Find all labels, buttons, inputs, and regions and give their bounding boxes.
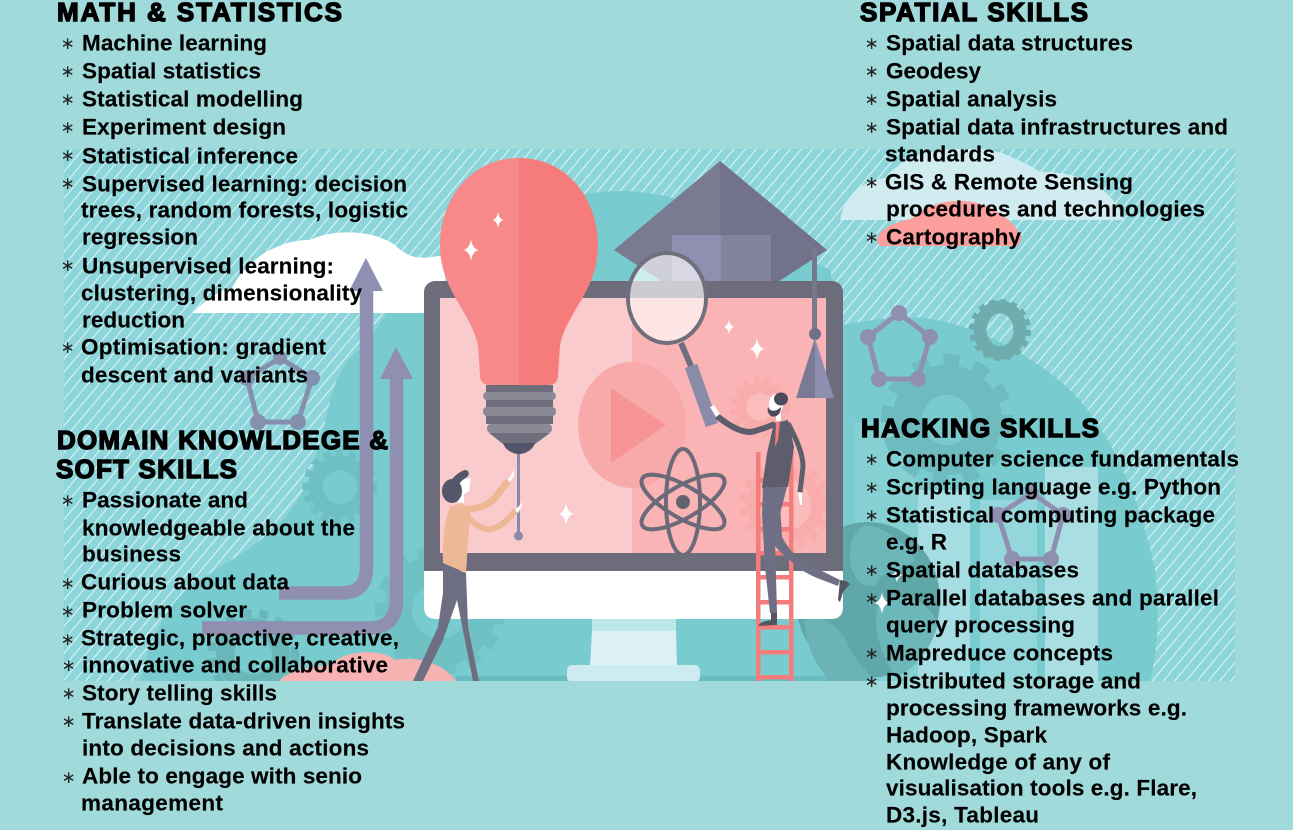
bullets: domain: ∗	[60, 574, 75, 594]
arrow 1	[279, 258, 383, 593]
list: hacking items: Statistical computing package	[886, 503, 1215, 528]
man arm left	[717, 416, 775, 432]
heading: domain knowledge: DOMAIN KNOWLDEGE &	[57, 425, 388, 455]
list: hacking items: Knowledge of any of	[886, 750, 1110, 775]
panel: hacking skills	[861, 413, 1239, 828]
person on ladder	[710, 392, 850, 626]
list: domain items	[81, 488, 405, 816]
ladder	[756, 452, 794, 682]
graduation cap	[614, 161, 827, 281]
gear bottom left	[211, 613, 295, 697]
head	[458, 478, 471, 503]
list: hacking items: D3.js, Tableau	[886, 803, 1039, 828]
list: hacking items: Mapreduce concepts	[886, 641, 1113, 666]
gear behind person	[380, 550, 500, 670]
list: hacking items: e.g. R	[886, 530, 947, 555]
man jacket	[762, 420, 794, 488]
list: hacking items	[886, 447, 1239, 828]
bullets: math: ∗	[60, 34, 75, 54]
bullets: domain: ∗	[60, 630, 75, 650]
list: math items: regression	[82, 225, 198, 250]
bullets: spatial: ∗	[864, 228, 879, 248]
illustration	[140, 149, 1158, 697]
list: domain items: management	[81, 791, 224, 816]
list: math items: Spatial statistics	[82, 59, 261, 84]
list: math items: descent and variants	[81, 363, 308, 388]
list: spatial items: Cartography	[886, 225, 1021, 250]
list: hacking items: Distributed storage and	[886, 669, 1141, 694]
bullets: domain	[60, 491, 76, 788]
bullets: domain: ∗	[60, 602, 75, 622]
gear left	[306, 453, 374, 521]
bullets: hacking: ∗	[864, 450, 879, 470]
list: spatial items: GIS & Remote Sensing	[885, 170, 1133, 195]
globe	[796, 522, 940, 681]
heading: domain knowledge	[56, 425, 388, 484]
list: hacking items: Spatial databases	[886, 558, 1079, 583]
list: domain items: Curious about data	[81, 570, 289, 595]
bullets: math	[60, 34, 75, 358]
light cloud top right	[840, 149, 1123, 220]
hatched illustration background	[64, 149, 1235, 681]
list: math items: trees, random forests, logistic	[81, 198, 408, 223]
bullets: domain: ∗	[62, 712, 76, 732]
monitor white chin	[424, 571, 843, 619]
gears on screen	[733, 380, 827, 547]
list: math items	[81, 31, 408, 388]
bullets: math: ∗	[60, 256, 75, 276]
list: domain items: Able to engage with senio	[82, 764, 362, 789]
cap tassel	[796, 248, 834, 398]
gear small right	[972, 302, 1028, 358]
list: spatial items	[885, 31, 1228, 250]
list: domain items: Problem solver	[82, 598, 247, 623]
play button	[578, 362, 686, 488]
screen left half	[440, 298, 632, 553]
panel: spatial skills	[860, 0, 1228, 250]
pink cloud bottom left	[279, 652, 456, 681]
monitor stand	[456, 618, 830, 682]
light bulb	[440, 158, 598, 540]
bulb screw base	[483, 385, 556, 454]
list: math items: Unsupervised learning:	[82, 254, 334, 279]
gear large right	[887, 360, 1007, 480]
man shoes	[758, 580, 850, 626]
list: hacking items: Hadoop, Spark	[886, 723, 1047, 748]
list: math items: Supervised learning: decision	[82, 172, 407, 197]
list: spatial items: Geodesy	[886, 59, 981, 84]
bullets: math: ∗	[60, 118, 75, 138]
city columns right	[855, 422, 1098, 682]
bullets: spatial	[864, 34, 879, 248]
list: math items: reduction	[82, 308, 185, 333]
screen right half	[632, 298, 826, 553]
atom icon	[634, 449, 732, 555]
bullets: hacking: ∗	[864, 672, 879, 692]
list: hacking items: Scripting language e.g. Python	[886, 475, 1221, 500]
list: spatial items: Spatial data structures	[886, 31, 1133, 56]
man arm right	[788, 423, 803, 492]
sweater body	[443, 503, 470, 573]
list: math items: Experiment design	[82, 115, 286, 140]
bullets: math: ∗	[60, 338, 75, 358]
bullets: hacking: ∗	[864, 644, 879, 664]
sweater arms	[462, 481, 508, 509]
magnifier	[628, 253, 712, 425]
hands	[508, 470, 523, 513]
bullets: spatial: ∗	[864, 34, 879, 54]
teal hills behind the monitor	[140, 191, 1158, 681]
bullets: math: ∗	[60, 90, 75, 110]
bullets: spatial: ∗	[864, 118, 879, 138]
man left leg	[762, 487, 787, 613]
bullets: math: ∗	[60, 146, 75, 166]
bullets: spatial: ∗	[864, 173, 879, 193]
pentagon network bottom right	[990, 486, 1071, 567]
pink cloud top right	[877, 201, 1022, 246]
list: domain items: Strategic, proactive, creative,	[81, 626, 399, 651]
pentagon network top right	[860, 305, 938, 387]
list: domain items: into decisions and actions	[82, 736, 369, 761]
list: domain items: Story telling skills	[82, 681, 277, 706]
monitor body	[424, 281, 843, 619]
white cloud left	[193, 232, 445, 313]
list: hacking items: query processing	[886, 613, 1075, 638]
heading: hacking skills: HACKING SKILLS	[861, 413, 1099, 443]
man head	[769, 394, 783, 414]
list: math items: Machine learning	[82, 31, 267, 56]
bullets: hacking: ∗	[864, 561, 879, 581]
panel: math and statistics	[57, 0, 408, 388]
arrow 2	[202, 347, 413, 628]
bulb cord	[517, 454, 520, 532]
list: domain items: Passionate and	[82, 488, 248, 513]
man right leg	[775, 512, 840, 586]
list: hacking items: processing frameworks e.g.	[886, 696, 1187, 721]
list: spatial items: procedures and technologies	[886, 197, 1205, 222]
list: domain items: Translate data-driven insights	[82, 709, 405, 734]
list: math items: Statistical modelling	[82, 87, 303, 112]
monitor	[424, 281, 843, 682]
bullets: math: ∗	[60, 62, 75, 82]
bullets: hacking: ∗	[864, 506, 879, 526]
list: domain items: innovative and collaborative	[82, 653, 388, 678]
bullets: domain: ∗	[62, 656, 76, 676]
bullets: domain: ∗	[62, 684, 76, 704]
list: hacking items: Parallel databases and parallel	[886, 586, 1219, 611]
bullets: domain: ∗	[62, 768, 76, 788]
pentagon network left	[239, 351, 320, 430]
list: domain items: business	[82, 542, 181, 567]
bullets: spatial: ∗	[864, 90, 879, 110]
list: spatial items: standards	[885, 142, 995, 167]
panel: domain knowledge and soft skills	[56, 425, 405, 816]
bullets: hacking: ∗	[864, 478, 879, 498]
list: math items: Optimisation: gradient	[81, 335, 326, 360]
trousers	[413, 565, 479, 681]
heading: domain knowledge: SOFT SKILLS	[56, 454, 237, 484]
bullets: math: ∗	[60, 174, 75, 194]
bullets: domain: ∗	[60, 491, 75, 511]
list: hacking items: Computer science fundamentals	[886, 447, 1239, 472]
list: math items: Statistical inference	[82, 144, 298, 169]
person left	[413, 470, 523, 681]
list: hacking items: visualisation tools e.g. Flare,	[886, 776, 1197, 801]
sparkles	[463, 212, 903, 614]
bullets: spatial: ∗	[864, 62, 879, 82]
list: domain items: knowledgeable about the	[82, 516, 355, 541]
list: spatial items: Spatial data infrastructures and	[886, 115, 1228, 140]
bullets: hacking	[864, 450, 879, 692]
bullets: hacking: ∗	[864, 589, 879, 609]
list: spatial items: Spatial analysis	[886, 87, 1057, 112]
list: math items: clustering, dimensionality	[81, 281, 362, 306]
